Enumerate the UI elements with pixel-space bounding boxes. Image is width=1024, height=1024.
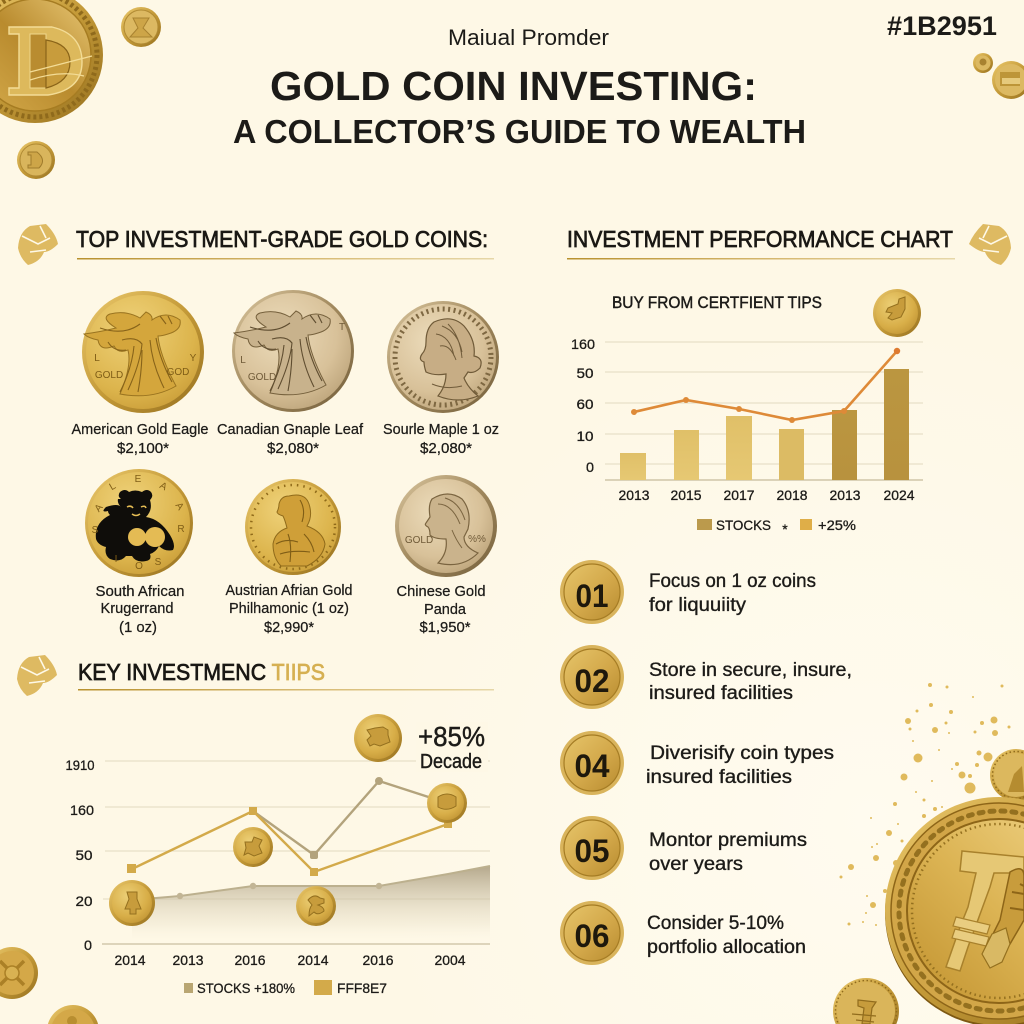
title	[233, 63, 806, 150]
coin labels row 1: Canadian Gnaple Leaf	[217, 421, 364, 438]
icon: gold swirl left top	[18, 224, 58, 265]
coin: South African Krugerrand: S	[92, 525, 99, 536]
coin: South African Krugerrand: O	[135, 561, 143, 572]
coin labels row 2: Krugerrand	[100, 600, 174, 617]
coin: top-left large decorative	[0, 0, 103, 123]
coin: left small	[17, 141, 55, 179]
y axis labels: 0	[84, 937, 92, 953]
coin: Canadian Gnaple Leaf: L	[240, 355, 246, 366]
chart subtitle: BUY FROM CERTFIENT TIPS	[612, 294, 822, 312]
y axis labels: 10	[576, 428, 594, 444]
tip 05: over years	[649, 854, 743, 875]
x axis labels: 2017	[724, 487, 755, 503]
coin: South African Krugerrand: S	[155, 557, 162, 568]
callout: +85% decade	[416, 721, 488, 773]
x axis labels: 2018	[776, 487, 808, 503]
coin: South African Krugerrand: L	[108, 480, 118, 493]
icon: gold swirl tips	[17, 655, 57, 696]
coin: top-right pair	[973, 53, 1024, 99]
coin labels row 2: Chinese Gold	[396, 583, 486, 600]
coin: top small	[121, 7, 161, 47]
tip 06: Consider 5-10%	[647, 913, 784, 934]
coin: Chinese Gold Panda	[395, 475, 497, 577]
grid lines	[605, 341, 923, 343]
icon: gold swirl right top	[969, 224, 1011, 265]
coin labels row 2: Austrian Afrian Gold	[226, 582, 352, 599]
tip 06	[560, 901, 806, 965]
coin labels row 1: $2,080*	[267, 440, 319, 457]
tip 04	[560, 731, 834, 795]
coin: Chinese Gold Panda: GOLD	[405, 535, 433, 546]
coin labels row 1	[72, 421, 499, 457]
coin: Canadian Gnaple Leaf: GOLD	[248, 372, 276, 383]
panel: coin grid	[72, 290, 499, 636]
coin: American Gold Eagle: L	[94, 353, 100, 364]
coin: American Gold Eagle: Y	[190, 353, 197, 364]
tip 02: 02	[574, 663, 610, 699]
coin: bottom left	[0, 947, 38, 999]
line chart	[66, 714, 490, 996]
orange trend line	[631, 348, 900, 423]
coin: bottom center right	[833, 978, 899, 1024]
y axis labels: 160	[70, 802, 94, 818]
tip 02: Store in secure, insure,	[649, 660, 852, 681]
coin: South African Krugerrand: I	[115, 554, 117, 565]
coin: bottom right large	[885, 797, 1024, 1024]
coin: South African Krugerrand: E	[135, 474, 142, 485]
coin: bottom right small upper	[990, 749, 1024, 801]
tip 04: Diverisify coin types	[650, 743, 834, 764]
tip 01: Focus on 1 oz coins	[649, 571, 816, 592]
legend: STOCKS	[716, 517, 771, 533]
coin labels row 1: $2,080*	[420, 440, 472, 457]
legend	[184, 980, 387, 996]
x axis labels: 2016	[362, 952, 394, 968]
y axis labels	[66, 757, 95, 953]
coin: Chinese Gold Panda: %%	[468, 534, 486, 545]
legend	[697, 517, 856, 537]
coin: American Gold Eagle: GOD	[167, 367, 189, 378]
tip 02: insured facilities	[649, 683, 793, 704]
y axis labels: 1910	[66, 757, 95, 773]
x axis labels: 2024	[884, 487, 915, 503]
tip 01: 01	[576, 578, 608, 614]
tip 06: portfolio allocation	[647, 937, 806, 958]
bars	[620, 369, 909, 480]
legend: FFF8E7	[337, 980, 387, 996]
stocks line	[253, 777, 447, 859]
x axis labels: 2013	[172, 952, 204, 968]
tip 04: insured facilities	[646, 767, 792, 788]
y axis labels: 20	[76, 893, 93, 909]
tip 06: 06	[574, 918, 610, 954]
bar chart	[571, 289, 923, 537]
coin labels row 2: $2,990*	[264, 619, 314, 636]
coin: Sourle Maple	[387, 301, 499, 413]
coin: South African Krugerrand: A	[173, 501, 186, 513]
coin labels row 2	[96, 582, 486, 636]
x axis labels: 2016	[234, 952, 266, 968]
coin: American Gold Eagle	[82, 291, 204, 413]
y axis labels: 50	[76, 847, 93, 863]
y axis labels: 60	[576, 396, 594, 412]
coin: South African Krugerrand: A	[158, 480, 169, 493]
coin: bottom left lower	[47, 1005, 99, 1024]
legend: +25%	[818, 517, 856, 533]
y axis labels: 0	[586, 459, 594, 475]
coin labels row 1: $2,100*	[117, 440, 169, 457]
coin labels row 2: $1,950*	[420, 619, 471, 636]
tip 05: 05	[574, 833, 610, 869]
hex code label: #1B2951	[887, 11, 997, 41]
tip 01: for liquuiity	[649, 595, 747, 616]
coin markers	[109, 714, 467, 926]
x axis labels: 2013	[618, 487, 650, 503]
x axis labels: 2015	[670, 487, 702, 503]
legend: *	[782, 521, 788, 537]
eyebrow text: Maiual Promder	[448, 25, 609, 50]
gold line	[127, 807, 452, 876]
y axis labels: 50	[576, 365, 594, 381]
coin labels row 2: South African	[96, 583, 184, 600]
y axis labels	[571, 336, 595, 475]
x axis labels	[114, 952, 466, 968]
callout: +85% decade: Decade	[420, 751, 482, 773]
y axis labels: 160	[571, 336, 595, 352]
grid lines	[105, 760, 490, 762]
coin badge	[873, 289, 921, 337]
numbered tips list	[560, 560, 852, 965]
coin labels row 1: American Gold Eagle	[72, 421, 208, 438]
coin: American Gold Eagle: GOLD	[95, 370, 123, 381]
tip 05: Montor premiums	[649, 830, 807, 851]
area series	[132, 866, 490, 944]
tip 02	[560, 645, 852, 709]
coin labels row 2: Panda	[424, 601, 467, 618]
coin labels row 2: Philhamonic (1 oz)	[229, 600, 349, 617]
x axis labels: 2004	[434, 952, 466, 968]
x axis labels: 2014	[114, 952, 146, 968]
heading: key tips: KEY INVESTMENC TIIPS	[78, 659, 325, 685]
title: A COLLECTOR’S GUIDE TO WEALTH	[233, 113, 806, 150]
tip 05	[560, 816, 807, 880]
coin: South African Krugerrand: R	[177, 524, 185, 535]
title: GOLD COIN INVESTING:	[270, 63, 757, 109]
heading: performance chart: INVESTMENT PERFORMANCE CHART	[567, 226, 953, 252]
coin: Austrian Philharmonic	[245, 479, 341, 575]
coin: South African Krugerrand	[85, 469, 193, 577]
heading: top coins: TOP INVESTMENT-GRADE GOLD COINS:	[76, 226, 488, 252]
legend: STOCKS +180%	[197, 980, 295, 996]
x axis labels: 2013	[830, 487, 861, 503]
x axis labels: 2014	[298, 952, 329, 968]
tip 01	[560, 560, 816, 624]
x axis labels	[618, 487, 915, 503]
coin: Canadian Gnaple Leaf: T	[339, 322, 345, 333]
callout: +85% decade: +85%	[418, 721, 485, 752]
tip 04: 04	[574, 748, 610, 784]
coin: Canadian Gnaple Leaf	[232, 290, 354, 412]
coin labels row 1: Sourle Maple 1 oz	[383, 421, 499, 438]
gold splatter	[840, 683, 1010, 926]
coin: South African Krugerrand: A	[93, 502, 106, 514]
coin labels row 2: (1 oz)	[119, 619, 157, 636]
